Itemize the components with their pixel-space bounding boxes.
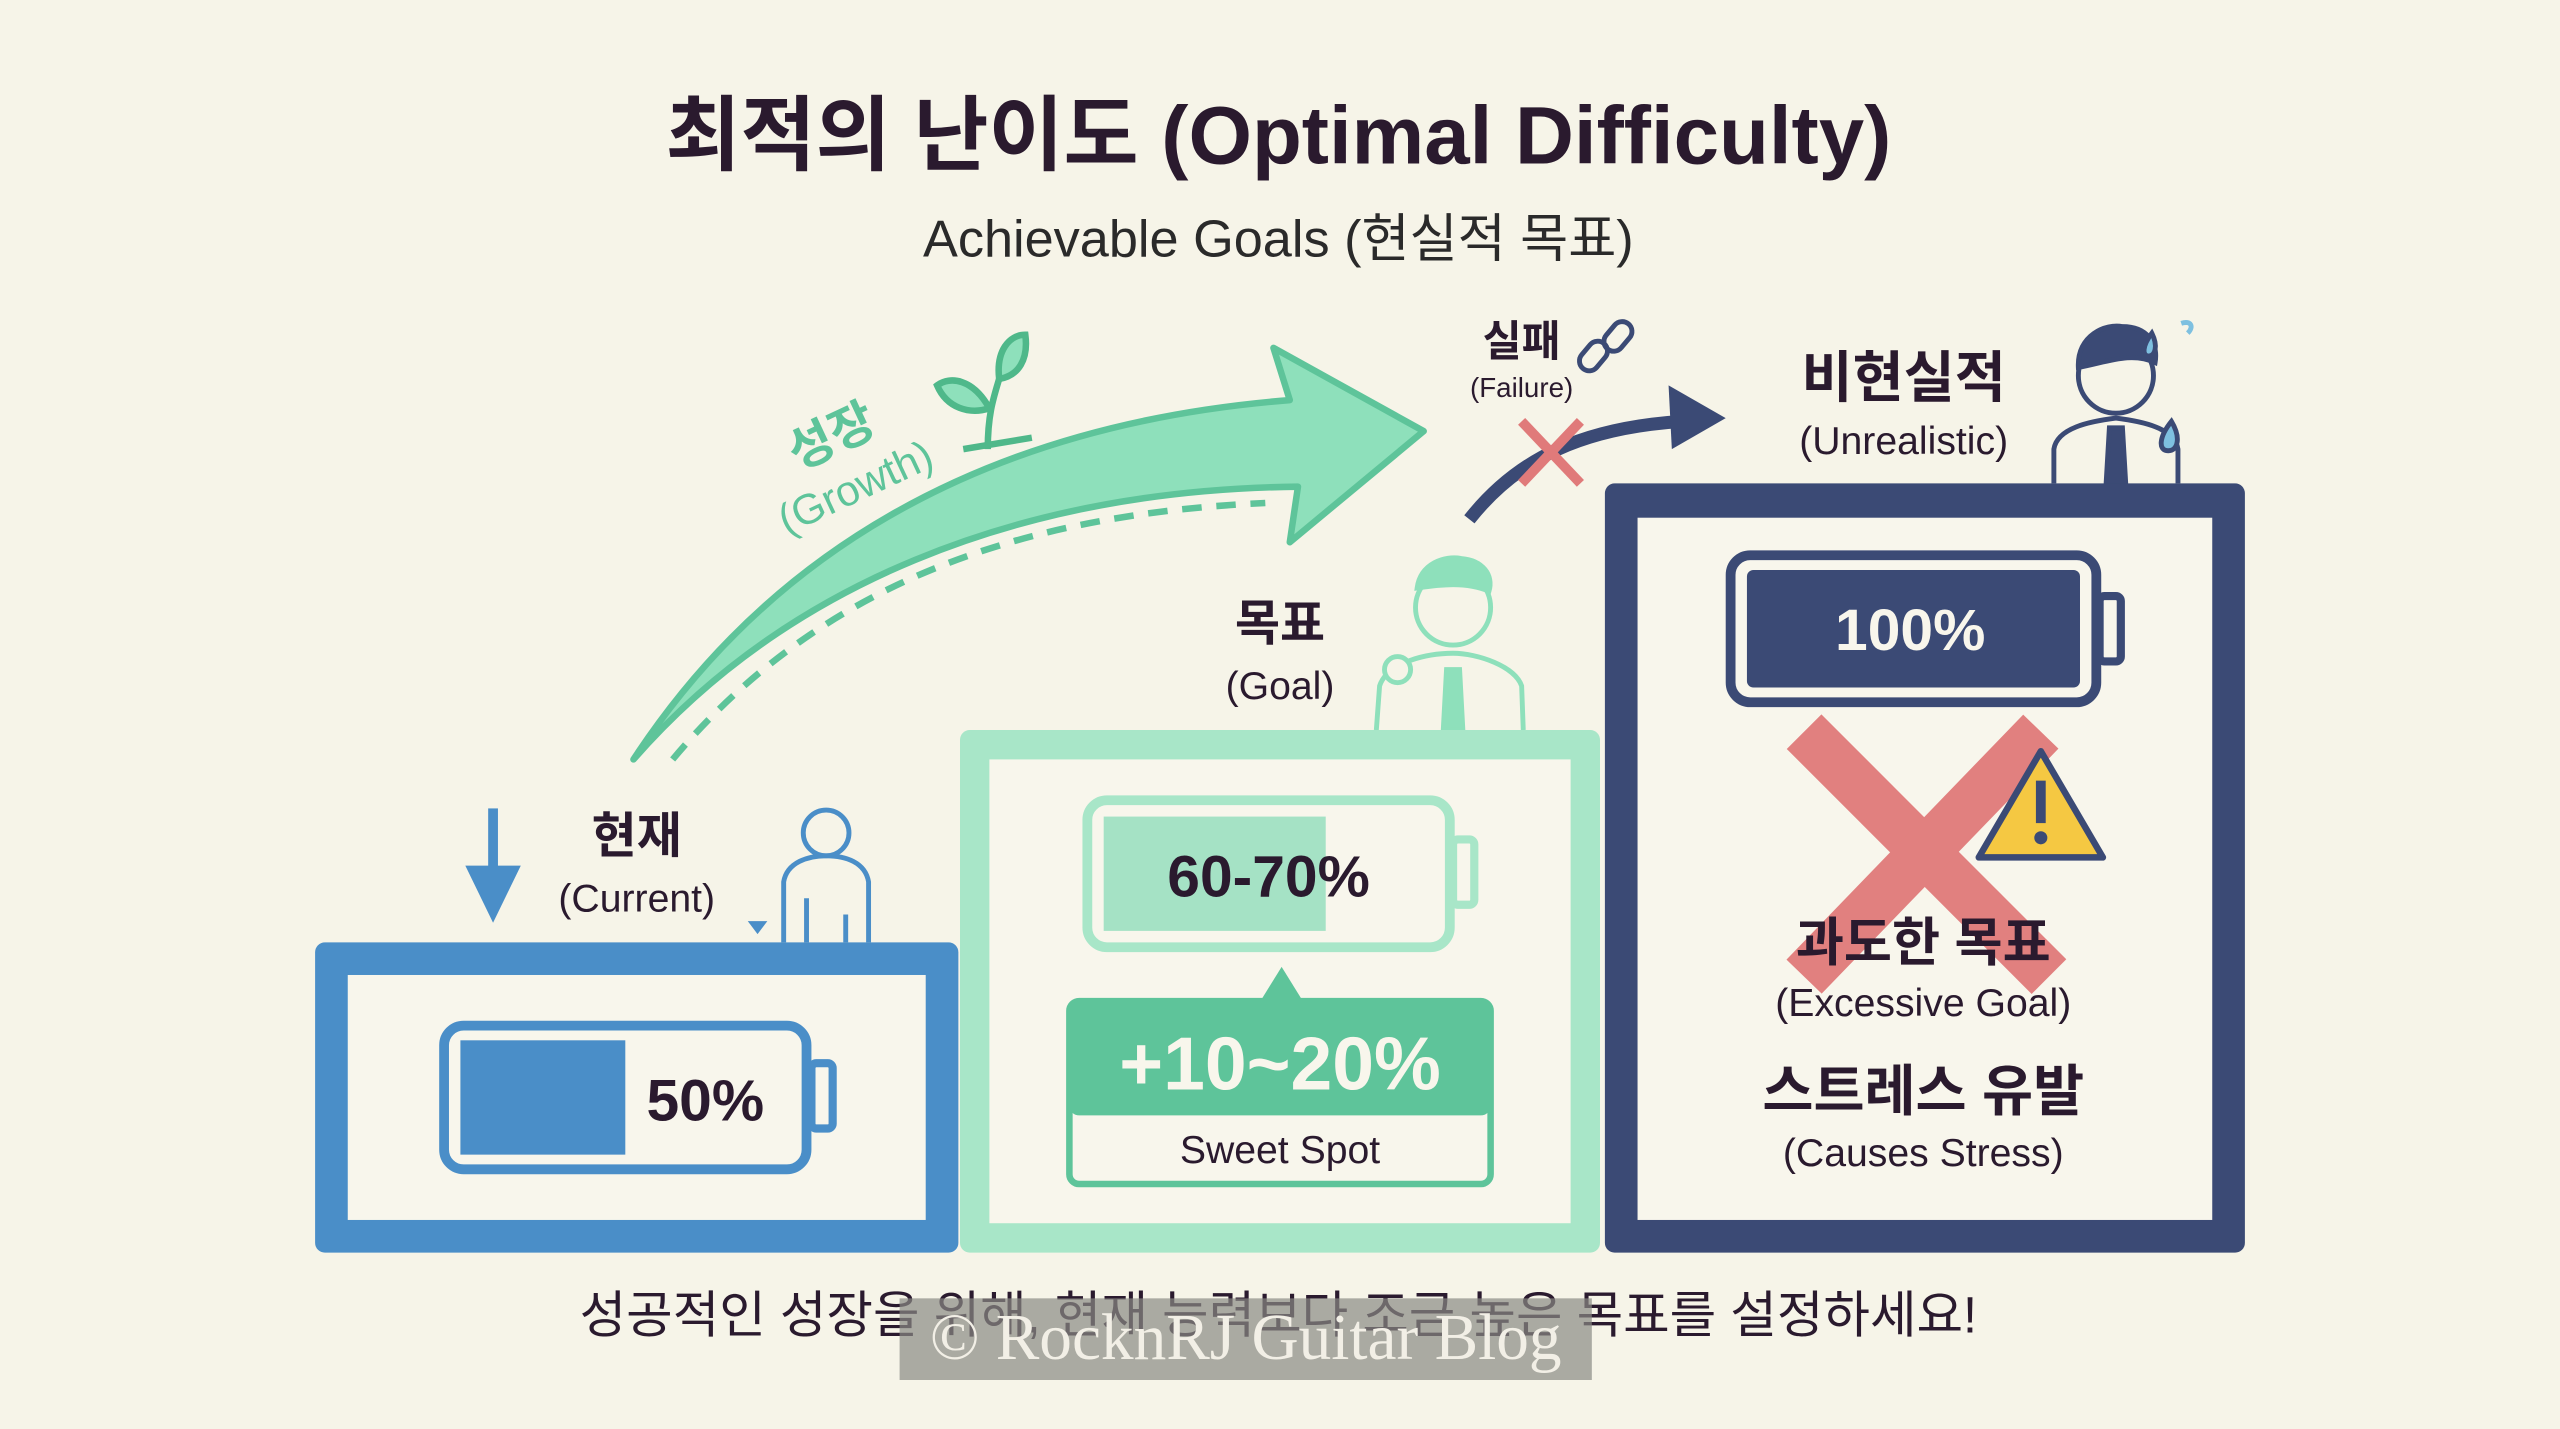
- watermark: © RocknRJ Guitar Blog: [930, 1302, 1562, 1374]
- icon: sprout: [937, 335, 1032, 449]
- icon: red x small: [1522, 421, 1580, 483]
- text: excessive goal: 과도한 목표: [1796, 914, 2051, 972]
- battery: 100%: [1731, 555, 2121, 702]
- growth arrow: [633, 348, 1424, 759]
- battery: 50%: [444, 1026, 833, 1169]
- label: growth: [746, 378, 940, 543]
- label: unrealistic: [1799, 347, 2008, 463]
- label: current: 현재: [592, 809, 682, 864]
- text: causes stress: [1762, 1061, 2084, 1175]
- label: failure: 실패: [1483, 318, 1561, 365]
- label: goal: (Goal): [1226, 665, 1334, 708]
- icon: seated person: [784, 810, 869, 942]
- label: growth: 성장: [780, 393, 884, 480]
- icon: down arrow: [465, 808, 521, 923]
- text: causes stress: (Causes Stress): [1783, 1132, 2064, 1175]
- panel: current: [315, 942, 958, 1253]
- text: excessive goal: [1775, 914, 2071, 1025]
- label: current: (Current): [558, 877, 715, 920]
- text: excessive goal: (Excessive Goal): [1775, 982, 2071, 1025]
- label: goal: [1226, 597, 1334, 708]
- label: current: [558, 809, 715, 920]
- bottom message: 성공적인 성장을 위해, 현재 능력보다 조금 높은 목표를 설정하세요!: [580, 1287, 1977, 1344]
- battery: 60-70%: 60-70%: [1167, 845, 1370, 910]
- callout: sweet spot: +10~20%: [1119, 1021, 1441, 1105]
- label: unrealistic: 비현실적: [1802, 347, 2006, 409]
- icon: broken chain: [1575, 318, 1636, 375]
- icon: warning: [1979, 751, 2103, 857]
- panel: unrealistic: [1605, 483, 2245, 1253]
- battery: 50%: 50%: [647, 1068, 764, 1133]
- callout: sweet spot: Sweet Spot: [1180, 1129, 1380, 1172]
- battery: 100%: 100%: [1835, 598, 1985, 663]
- navy failure arrow: [1469, 385, 1726, 519]
- label: growth: (Growth): [771, 431, 940, 543]
- icon: stressed person: [2054, 322, 2191, 483]
- icon: determined person: [1376, 558, 1523, 730]
- icon: big red x: [1804, 732, 2049, 977]
- label: failure: [1470, 318, 1573, 403]
- label: failure: (Failure): [1470, 372, 1573, 403]
- battery: 60-70%: [1087, 800, 1474, 947]
- subtitle: Achievable Goals (현실적 목표): [923, 210, 1634, 268]
- label: unrealistic: (Unrealistic): [1799, 420, 2008, 463]
- label: goal: 목표: [1235, 597, 1325, 651]
- icon: small triangle: [748, 921, 767, 934]
- callout: sweet spot: [1069, 967, 1491, 1184]
- title: 최적의 난이도 (Optimal Difficulty): [665, 90, 1891, 181]
- text: causes stress: 스트레스 유발: [1762, 1061, 2084, 1123]
- panel: goal: [960, 730, 1600, 1253]
